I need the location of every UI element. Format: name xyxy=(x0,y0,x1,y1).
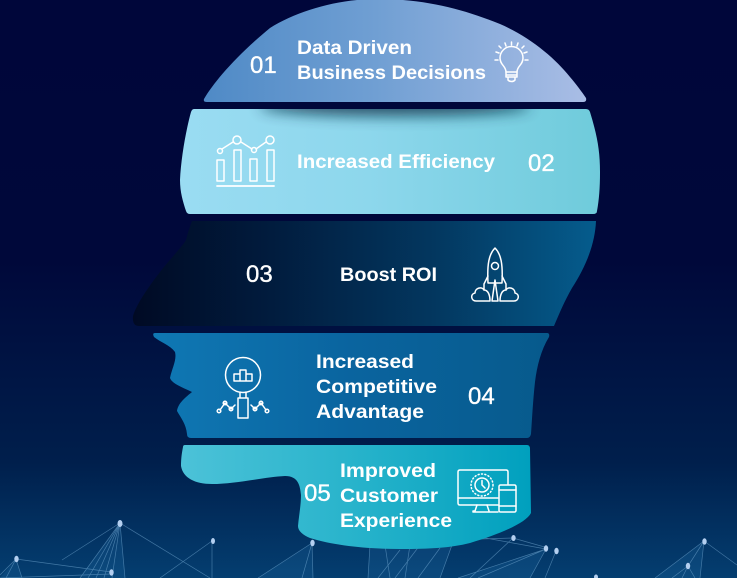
network graphic xyxy=(0,520,737,578)
heading 05: Customer xyxy=(340,485,438,507)
icon: rocket xyxy=(472,248,518,301)
heading 04: Increased xyxy=(316,351,414,373)
panel 02: increased efficiency xyxy=(180,109,600,214)
icon: magnifier with chart xyxy=(217,358,269,418)
heading 04: Advantage xyxy=(316,401,424,423)
number 05: 05 xyxy=(304,480,331,507)
number 04: 04 xyxy=(468,383,495,410)
panel 05: improved customer experience xyxy=(181,445,531,549)
number 03: 03 xyxy=(246,261,273,288)
icon: bar chart with trend line xyxy=(217,136,274,186)
heading 01: Business Decisions xyxy=(297,62,486,84)
icon: desktop and phone xyxy=(458,470,516,512)
heading 03: Boost ROI xyxy=(340,264,437,286)
panel 03: boost ROI xyxy=(133,221,596,326)
number 01: 01 xyxy=(250,52,277,79)
heading 04: Competitive xyxy=(316,376,437,398)
shadow band xyxy=(260,96,530,116)
heading 05: Improved xyxy=(340,460,436,482)
panel 04: increased competitive advantage xyxy=(153,333,549,438)
icon: light bulb xyxy=(495,42,528,82)
heading 01: Data Driven xyxy=(297,37,412,59)
heading 05: Experience xyxy=(340,510,452,532)
number 02: 02 xyxy=(528,150,555,177)
heading 02: Increased Efficiency xyxy=(297,151,495,173)
panel 01: data driven business decisions xyxy=(204,0,586,102)
